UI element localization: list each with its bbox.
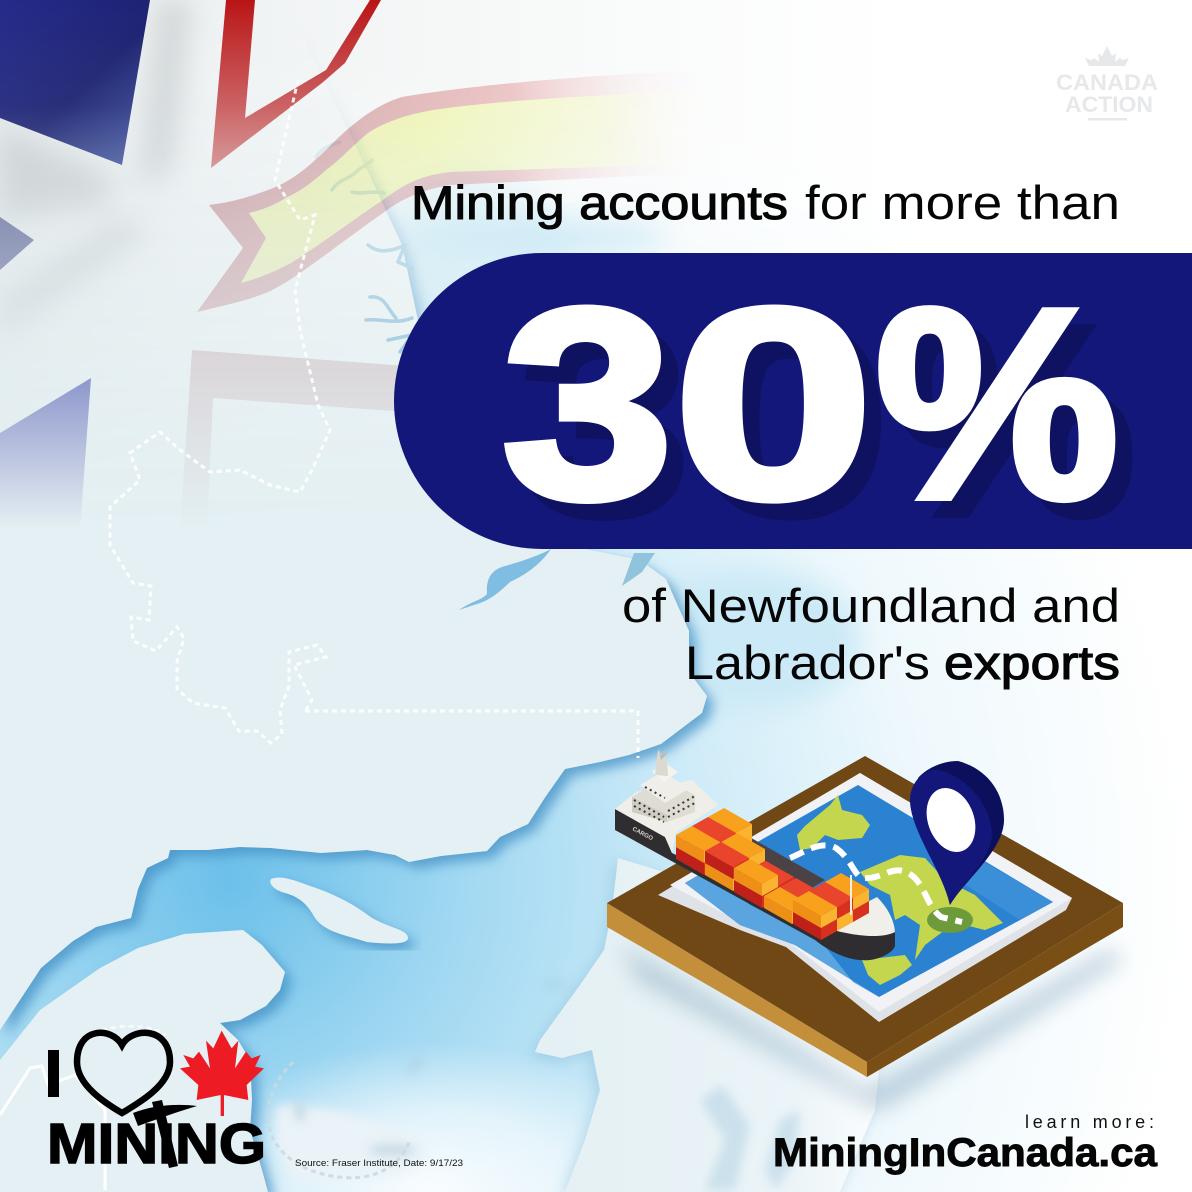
background: flag [0,0,668,478]
map: lake inlet [459,549,551,610]
map: Newfoundland island [535,858,880,1192]
board side right [867,903,1123,1077]
logo: Canada Action watermark: ACTION [1065,92,1153,117]
background: pale coastal water [360,170,580,430]
ship: bow mast [850,875,852,915]
map ocean [685,785,1053,997]
big number: 30%: % [876,254,1118,555]
background: pale water over the flag edge [410,218,670,258]
map: green destination [927,907,973,933]
flag: red arrow band [197,74,630,312]
ship: hull [615,809,895,960]
big number shadow: 0 [690,271,890,572]
big number: 30% [502,254,1118,555]
ship: bow deck [821,897,895,936]
flag: navy top quarter [0,0,150,165]
source note: Source: Fraser Institute, Date: 9/17/23 [295,1157,463,1168]
callout: bottom text [622,579,1120,689]
call to action: website: MiningInCanada.ca [773,1131,1158,1175]
flag: gold arrow [241,94,631,283]
flag: red outline top [211,0,381,168]
illustration: cargo ship [615,745,895,960]
illustration: board shadow [620,945,1123,1110]
callout: top text [411,176,1120,229]
icon: location pin [910,761,1004,905]
flag: lower navy quarter [0,378,91,530]
map: Anticosti island [270,878,408,943]
logo: Canada Action watermark [1056,46,1158,120]
map: provincial dotted borders [80,80,638,1178]
map: dashed route [790,845,962,922]
logo: heart [77,1033,170,1113]
map: Prince Edward Island and Nova Scotia haze [275,1105,428,1180]
callout: top text: Mining accounts [411,176,788,229]
flag: navy mid wedge [0,217,34,270]
map: Gaspe and Maritimes land [0,930,285,1192]
flag: cloth folds [0,0,190,340]
ship: stern deck [615,780,718,853]
logo: letter I [48,1050,59,1097]
map: soft island shadows [294,1054,426,1156]
ship: containers [676,808,869,940]
flag: red lower band [184,350,398,478]
call to action: learn more: learn more: [1025,1112,1154,1132]
callout: bottom text: of Newfoundland and [622,579,1120,632]
big number shadow: % [892,271,1136,572]
logo: Canada Action watermark: CANADA [1056,70,1158,95]
board top [607,756,1123,1062]
callout: navy bar [394,253,1192,549]
ship: cargo hold [735,835,825,895]
big number: 30%: 0 [674,254,874,555]
logo: I love mining [47,1031,266,1176]
ship: superstructure [632,745,695,822]
map: north inlet [622,553,655,586]
map: Labrador and Quebec land [0,0,707,1030]
illustration: wooden board and map [607,756,1123,1077]
map continents [797,795,870,850]
big number shadow [519,271,1136,572]
map: Newfoundland inlets [541,981,800,1190]
logo: pickaxe [133,1100,197,1168]
background: pale water beside Labrador [640,570,860,710]
background: pale water at the bottom [180,1042,680,1192]
map paper [658,773,1072,1022]
callout: top text: for more than [805,176,1120,229]
callout: bottom text: Labrador's [685,636,930,689]
map: white roads bottom left [0,1066,105,1190]
callout: bottom text: exports [944,636,1120,689]
ship: cargo label: CARGO [631,826,654,842]
logo: MINING text: MINING [47,1112,266,1176]
logo: maple leaf [180,1031,264,1116]
board side left [607,903,867,1077]
map: coastal inlets [316,142,412,352]
big number shadow: 3 [519,271,690,572]
big number: 30%: 3 [502,254,673,555]
